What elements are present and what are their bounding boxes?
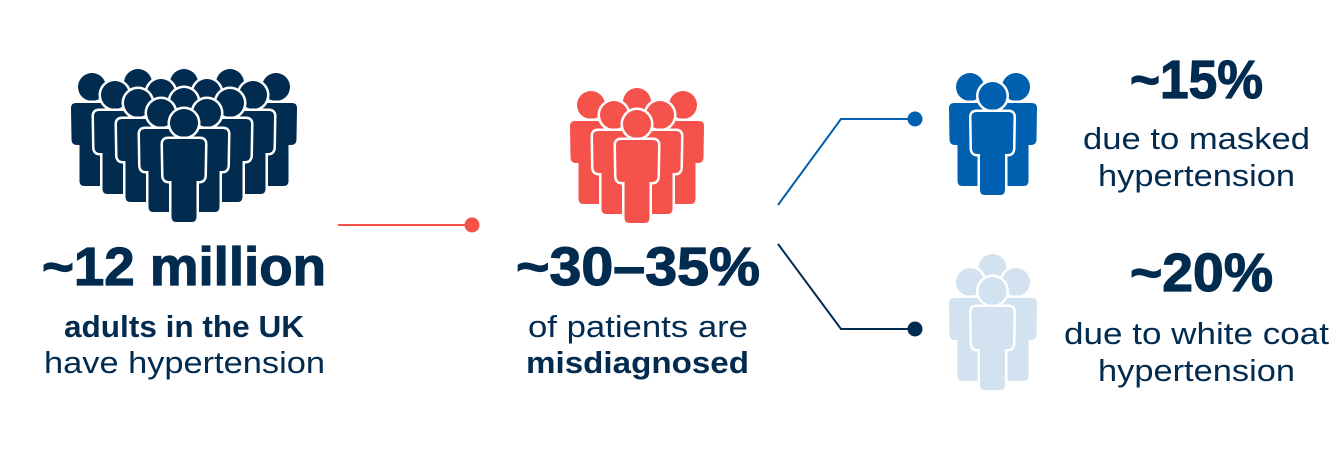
heading: 15%: ~15%	[1130, 50, 1263, 110]
arrow: blue connector	[778, 112, 922, 205]
text: due to white coat: due to white coat	[1064, 316, 1329, 351]
arrow: navy connector	[778, 244, 922, 336]
icon: misdiagnosed group	[570, 88, 704, 223]
text: due to masked: due to masked	[1083, 121, 1310, 156]
text: adults in the UK: adults in the UK	[64, 309, 305, 344]
arrow: red connector	[338, 218, 480, 232]
text: of patients are: of patients are	[528, 309, 748, 344]
text: have hypertension: have hypertension	[44, 345, 325, 380]
icon: masked hypertension group	[949, 73, 1037, 195]
heading: 20%: ~20%	[1130, 243, 1273, 303]
text: misdiagnosed: misdiagnosed	[526, 345, 749, 380]
heading: 12 million: ~12 million	[42, 237, 326, 297]
text: hypertension: hypertension	[1098, 158, 1295, 193]
icon: crowd of adults	[71, 69, 297, 222]
text: hypertension: hypertension	[1098, 353, 1295, 388]
icon: white coat hypertension group	[949, 254, 1037, 390]
heading: 30-35%: ~30–35%	[516, 237, 760, 297]
